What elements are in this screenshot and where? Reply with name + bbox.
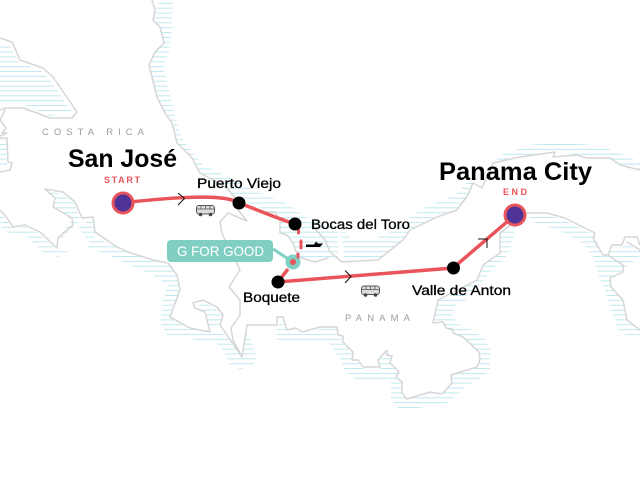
G for Good connector and stop [273,249,300,270]
icon: bus near Puerto Viejo [196,206,214,216]
country label: Costa Rica: COSTA RICA [42,127,145,138]
start label: START [104,175,140,185]
stop label: Boquete: Boquete [243,290,300,305]
stop markers [232,196,460,288]
country label: Panama: PANAMA [345,313,411,324]
start marker [113,193,133,213]
heading: San José: San José [68,145,177,173]
icon: bus near Panama [362,286,380,297]
route line [123,197,515,282]
G for Good callout: G FOR GOOD [177,243,264,259]
G for Good callout [167,240,273,262]
direction arrows [178,193,487,283]
end label: END [503,187,528,197]
stop label: Valle de Anton: Valle de Anton [412,283,511,298]
heading: Panama City: Panama City [439,158,592,186]
stop label: Puerto Viejo: Puerto Viejo [197,176,281,191]
icon: boat [306,242,323,247]
end marker [505,205,525,225]
stop label: Bocas del Toro: Bocas del Toro [311,217,410,232]
